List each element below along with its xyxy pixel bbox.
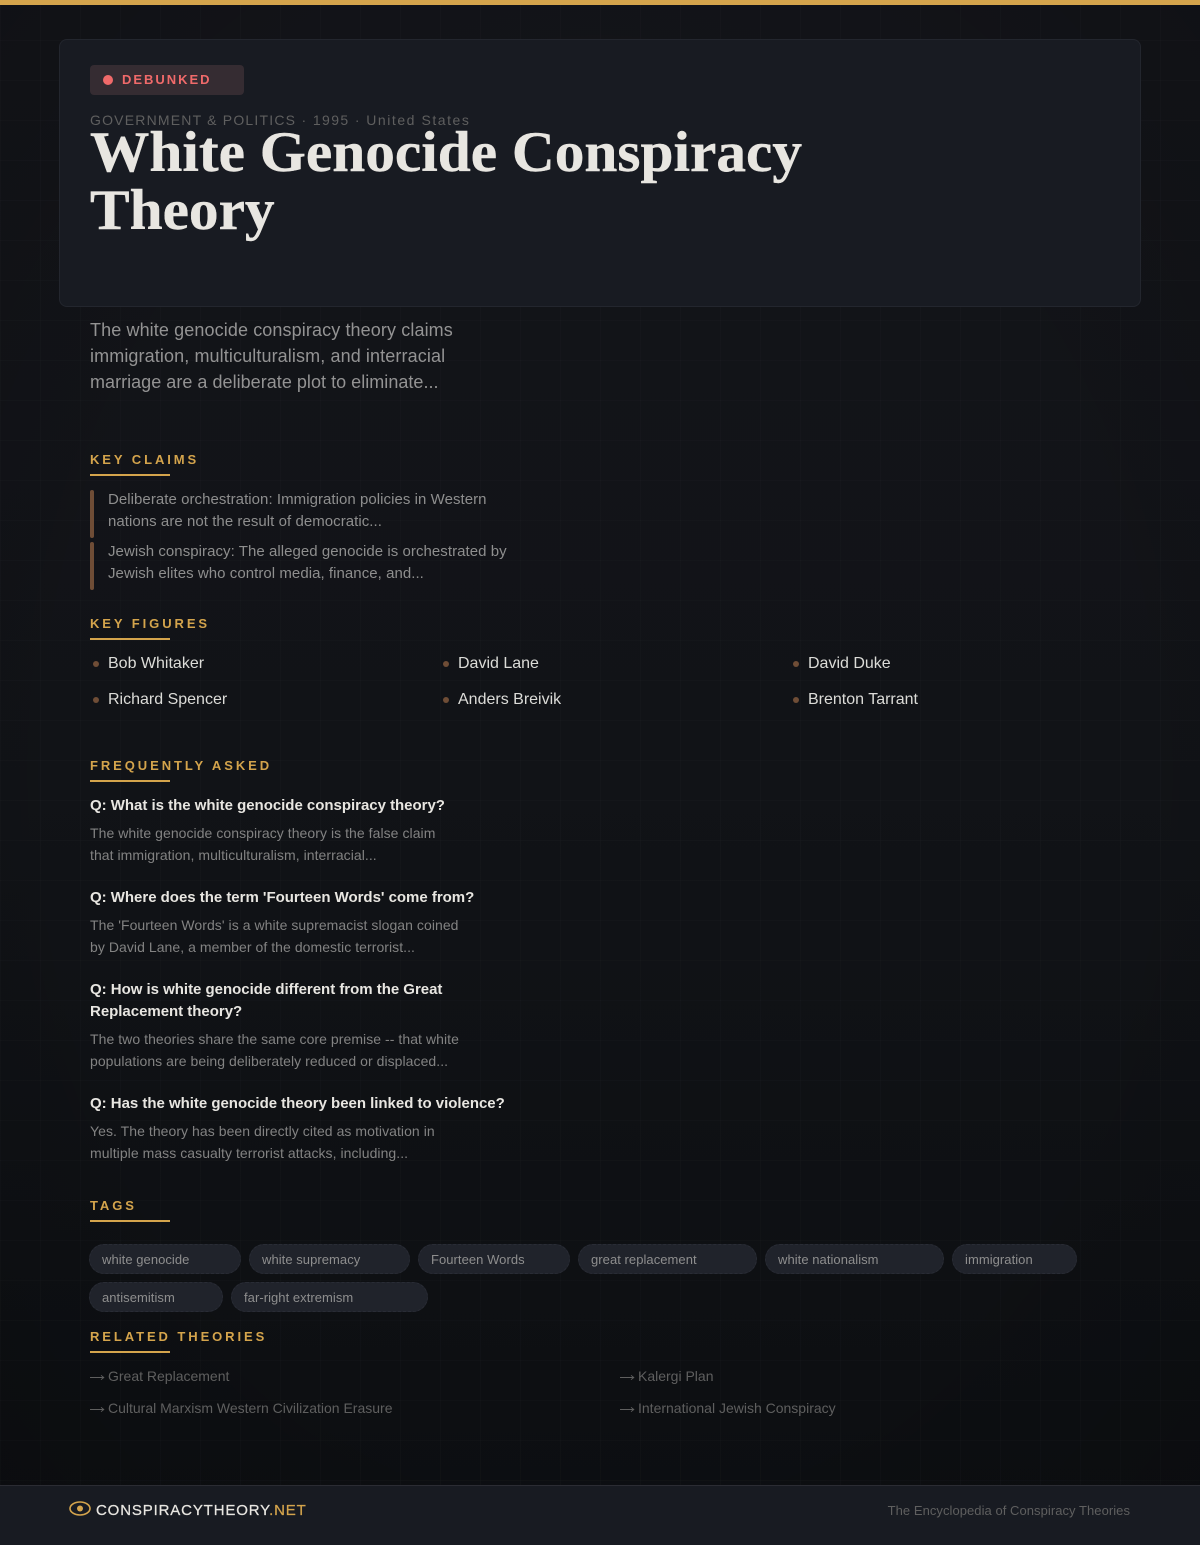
figure: David Lane: David Lane — [458, 655, 539, 672]
title: White Genocide Conspiracy — [90, 121, 802, 184]
related: Kalergi Plan: Kalergi Plan — [638, 1368, 714, 1384]
title — [90, 121, 802, 242]
claim 1: Deliberate orchestration: Immigration policies in Western — [108, 491, 487, 508]
figure: Anders Breivik: Anders Breivik — [458, 691, 561, 708]
top accent bar — [0, 0, 1200, 5]
faq 1: The white genocide conspiracy theory is the false claim — [90, 825, 435, 841]
heading: frequently asked: FREQUENTLY ASKED — [90, 758, 272, 773]
category meta line: GOVERNMENT & POLITICS · 1995 · United States — [90, 112, 470, 128]
tag: white supremacy — [249, 1244, 410, 1274]
claim 1 — [90, 490, 487, 538]
heading: key figures: KEY FIGURES — [90, 616, 210, 631]
related: International Jewish Conspiracy: International Jewish Conspiracy — [638, 1400, 836, 1416]
tag: great replacement — [578, 1244, 757, 1274]
tag: white genocide: white genocide — [102, 1252, 189, 1267]
figure: David Duke: David Duke — [808, 655, 891, 672]
tag: antisemitism: antisemitism — [102, 1290, 175, 1305]
claim 2: Jewish conspiracy: The alleged genocide is orchestrated by — [108, 543, 507, 560]
figure: Brenton Tarrant: Brenton Tarrant — [808, 691, 918, 708]
badge label: DEBUNKED — [122, 72, 212, 87]
faq 3 — [90, 981, 459, 1069]
tag: Fourteen Words — [418, 1244, 570, 1274]
header panel — [59, 39, 1141, 307]
figure: Richard Spencer: Richard Spencer — [108, 691, 227, 708]
badge dot — [103, 75, 113, 85]
title: Theory — [90, 179, 275, 242]
tag: immigration: immigration — [965, 1252, 1033, 1267]
tag: white genocide — [89, 1244, 241, 1274]
tag: Fourteen Words: Fourteen Words — [431, 1252, 525, 1267]
tag: antisemitism — [89, 1282, 223, 1312]
faq 3: populations are being deliberately reduced or displaced... — [90, 1053, 448, 1069]
faq 2: The 'Fourteen Words' is a white supremacist slogan coined — [90, 917, 459, 933]
faq 1 — [90, 797, 445, 863]
heading: tags: TAGS — [90, 1198, 137, 1213]
faq 1: Q: What is the white genocide conspiracy theory? — [90, 797, 445, 814]
tag: far-right extremism: far-right extremism — [244, 1290, 353, 1305]
tag: white nationalism — [765, 1244, 944, 1274]
footer bar — [0, 1485, 1200, 1545]
intro summary: immigration, multiculturalism, and interracial — [90, 346, 445, 366]
faq 3: The two theories share the same core premise -- that white — [90, 1031, 459, 1047]
faq 4 — [90, 1095, 505, 1161]
status badge: debunked — [90, 65, 244, 95]
tag: far-right extremism — [231, 1282, 428, 1312]
related: Great Replacement: Great Replacement — [108, 1368, 229, 1384]
claim 1: nations are not the result of democratic... — [108, 513, 382, 530]
intro summary: The white genocide conspiracy theory claims — [90, 320, 453, 340]
intro summary — [90, 320, 453, 392]
claim 2 — [90, 542, 507, 590]
icon: eye logo — [69, 1501, 91, 1516]
faq 2 — [90, 889, 474, 955]
related: Cultural Marxism Western Civilization Erasure: Cultural Marxism Western Civilization Erasure — [108, 1400, 392, 1416]
faq 3: Q: How is white genocide different from the Great — [90, 981, 442, 998]
tag: immigration — [952, 1244, 1077, 1274]
tag: white supremacy: white supremacy — [262, 1252, 360, 1267]
figure: Bob Whitaker: Bob Whitaker — [108, 655, 204, 672]
heading: key claims: KEY CLAIMS — [90, 452, 199, 467]
footer tagline: The Encyclopedia of Conspiracy Theories — [888, 1503, 1130, 1518]
faq 2: Q: Where does the term 'Fourteen Words' come from? — [90, 889, 474, 906]
heading: related theories: RELATED THEORIES — [90, 1329, 267, 1344]
claim 2: Jewish elites who control media, finance, and... — [108, 565, 424, 582]
faq 1: that immigration, multiculturalism, interracial... — [90, 847, 377, 863]
tag: great replacement: great replacement — [591, 1252, 697, 1267]
intro summary: marriage are a deliberate plot to eliminate... — [90, 372, 439, 392]
tag: white nationalism: white nationalism — [778, 1252, 879, 1267]
brand wordmark: CONSPIRACYTHEORY.NET — [96, 1502, 307, 1519]
faq 4: multiple mass casualty terrorist attacks, including... — [90, 1145, 408, 1161]
faq 4: Yes. The theory has been directly cited as motivation in — [90, 1123, 435, 1139]
faq 2: by David Lane, a member of the domestic terrorist... — [90, 939, 415, 955]
faq 4: Q: Has the white genocide theory been linked to violence? — [90, 1095, 505, 1112]
faq 3: Replacement theory? — [90, 1003, 242, 1020]
